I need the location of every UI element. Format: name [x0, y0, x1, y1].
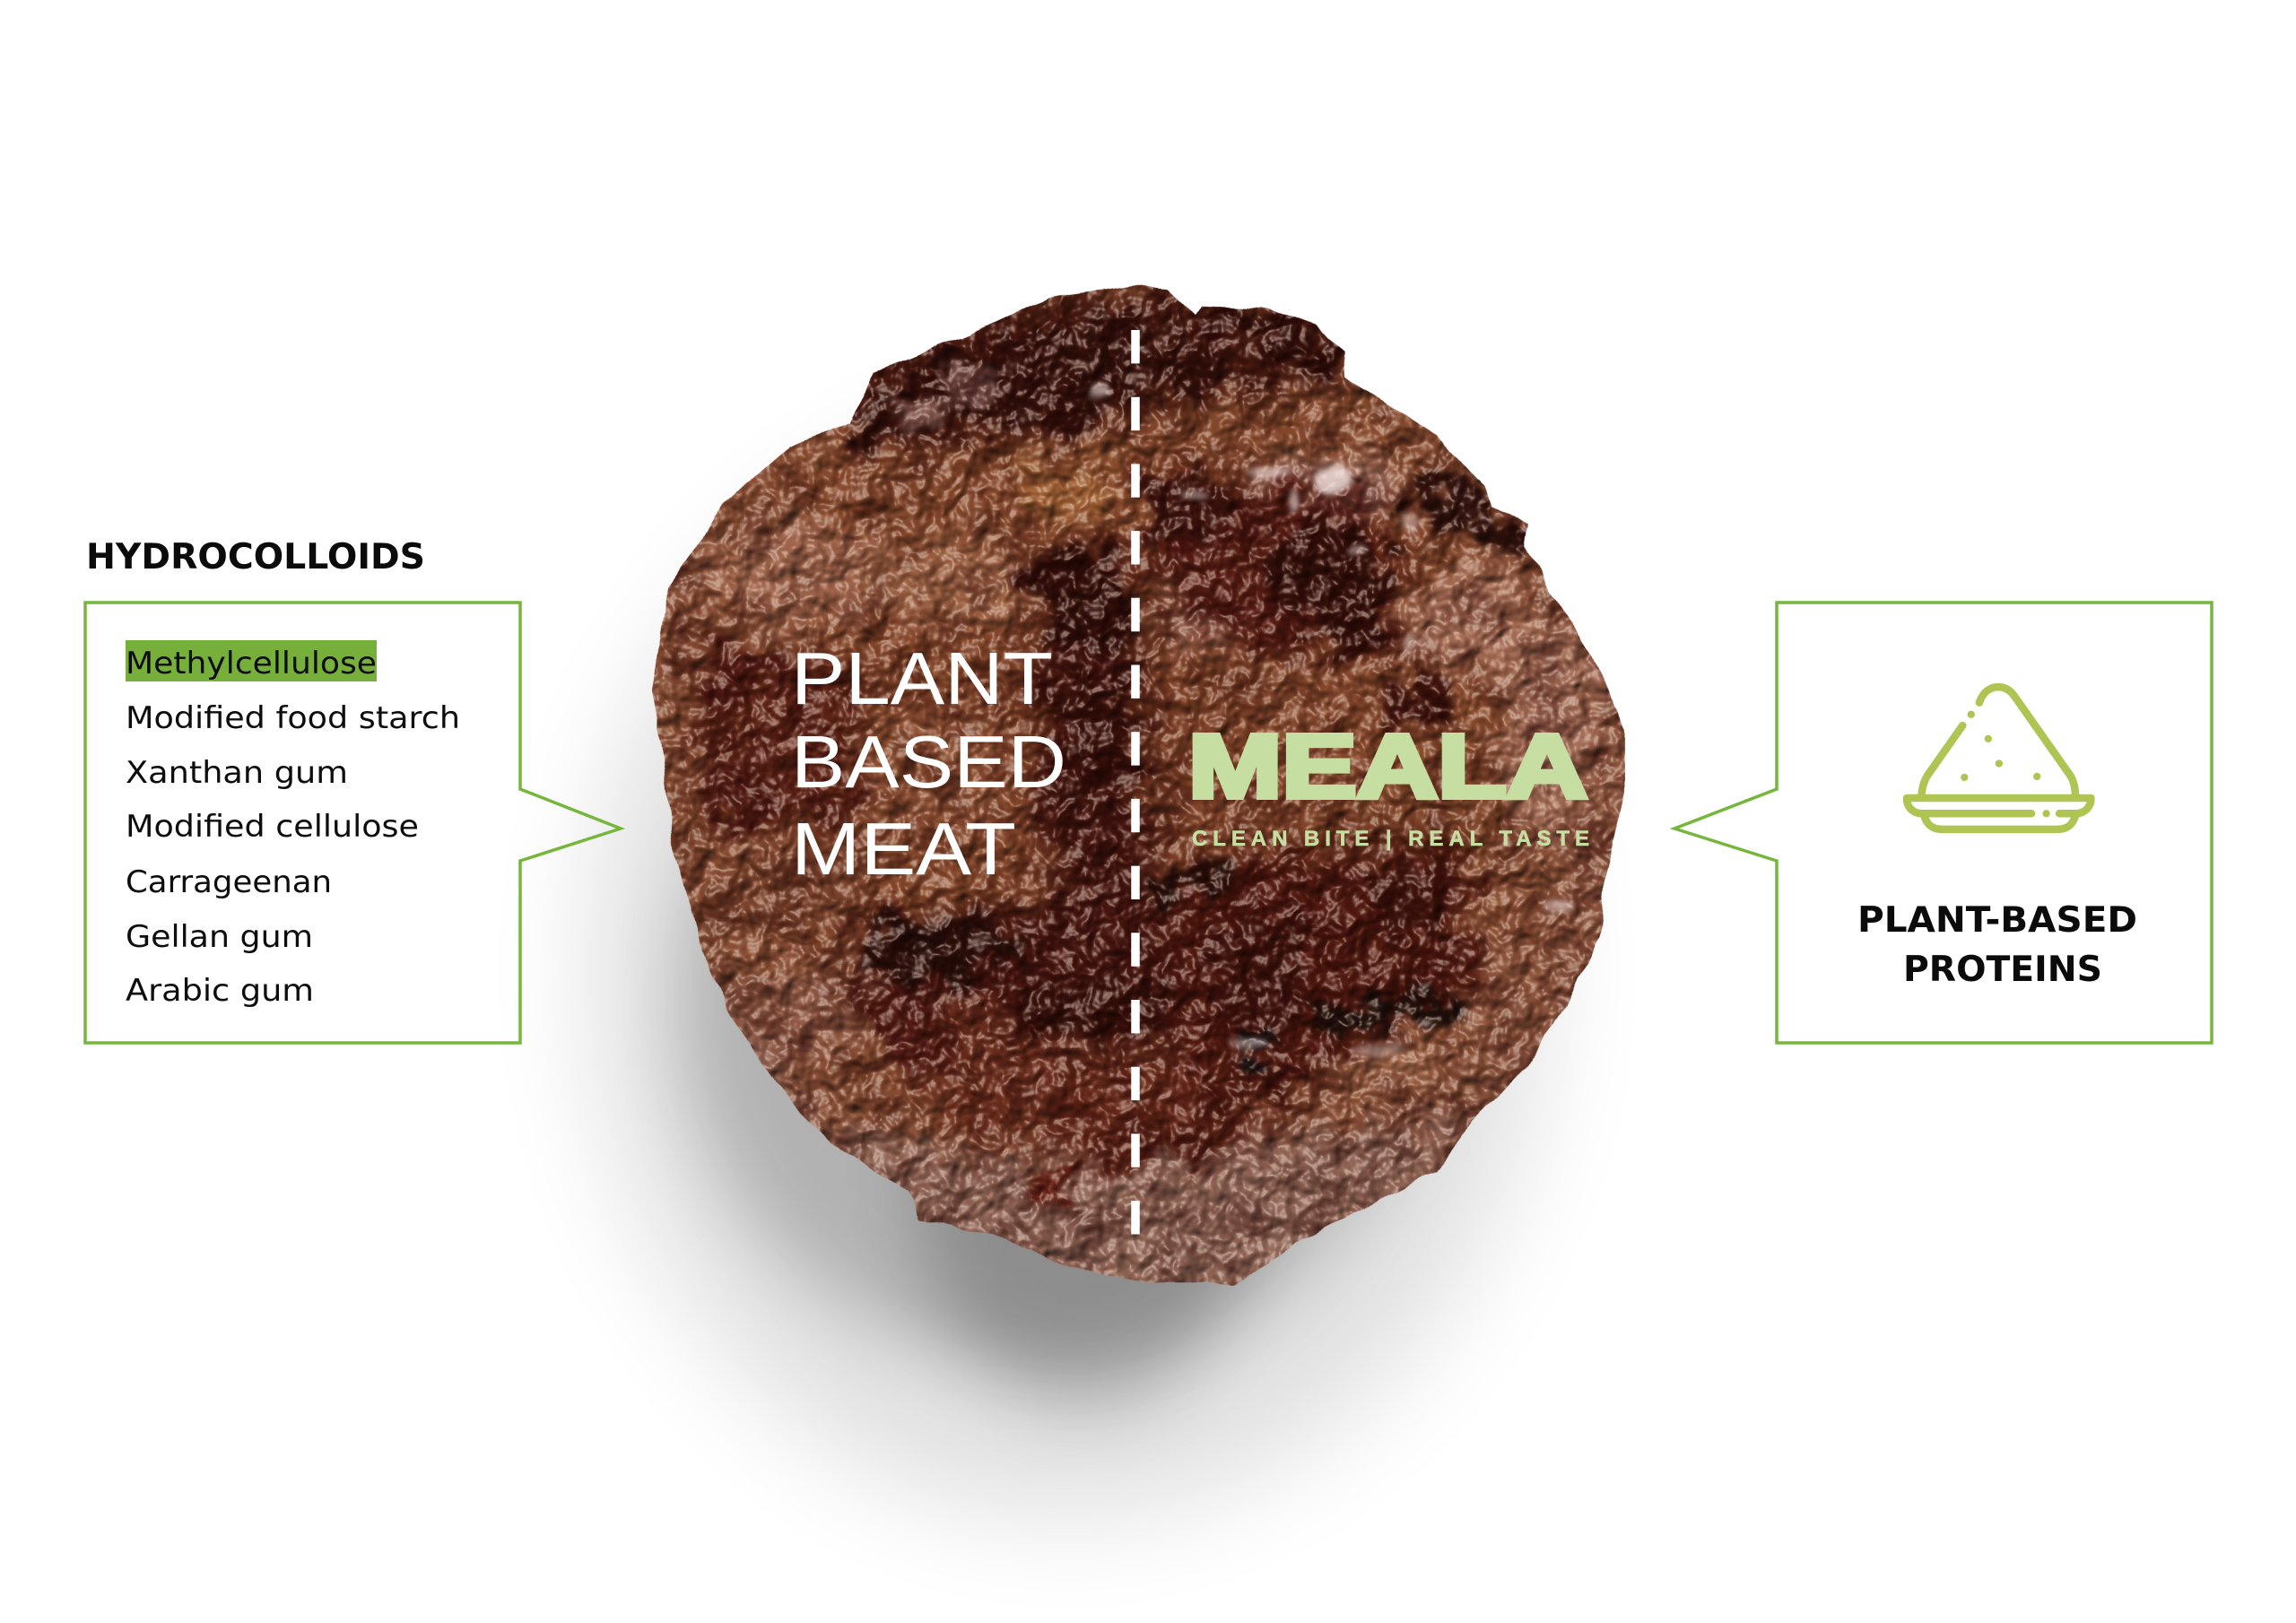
ingredient list: Modified cellulose — [126, 809, 419, 845]
label: plant-based proteins — [1857, 900, 2137, 990]
patty label: plant based meat: MEAT — [791, 807, 1016, 890]
patty colour regions — [682, 292, 1603, 1322]
patty photo illustration — [652, 284, 1625, 1286]
callout box left — [85, 603, 621, 1043]
ingredient list: Gellan gum — [126, 919, 313, 955]
char patches — [857, 302, 1161, 454]
label: plant-based proteins: PROTEINS — [1903, 950, 2102, 990]
highlight: methylcellulose — [126, 640, 377, 681]
patty label: plant based meat — [791, 637, 1066, 890]
label: plant-based proteins: PLANT-BASED — [1857, 900, 2137, 941]
logo: Meala: MEALA — [1188, 716, 1587, 817]
ingredient list: Methylcellulose — [126, 646, 377, 681]
heading: hydrocolloids: HYDROCOLLOIDS — [86, 537, 425, 577]
panel: plant-based proteins — [1674, 603, 2212, 1043]
panel: hydrocolloids — [85, 537, 621, 1043]
logo: Meala — [1188, 716, 1589, 851]
patty label: plant based meat: PLANT — [791, 637, 1053, 720]
ingredient list: Arabic gum — [126, 973, 314, 1009]
patty texture: lumpy shading and gloss — [652, 285, 1625, 1286]
icon: powder pile on plate — [1907, 687, 2091, 829]
ingredient list: Xanthan gum — [126, 755, 348, 791]
ingredient list: Modified food starch — [126, 700, 460, 736]
logo: Meala: CLEAN BITE | REAL TASTE — [1192, 827, 1589, 851]
callout box right — [1674, 603, 2212, 1043]
patty glints — [1091, 385, 1575, 1055]
dashed divider line — [1131, 330, 1140, 1235]
patty drop shadow — [592, 421, 1543, 1515]
infographic canvas — [83, 284, 2213, 1543]
patty label: plant based meat: BASED — [791, 720, 1066, 803]
ingredient list: Carrageenan — [126, 864, 332, 900]
ingredient list — [126, 646, 460, 1009]
